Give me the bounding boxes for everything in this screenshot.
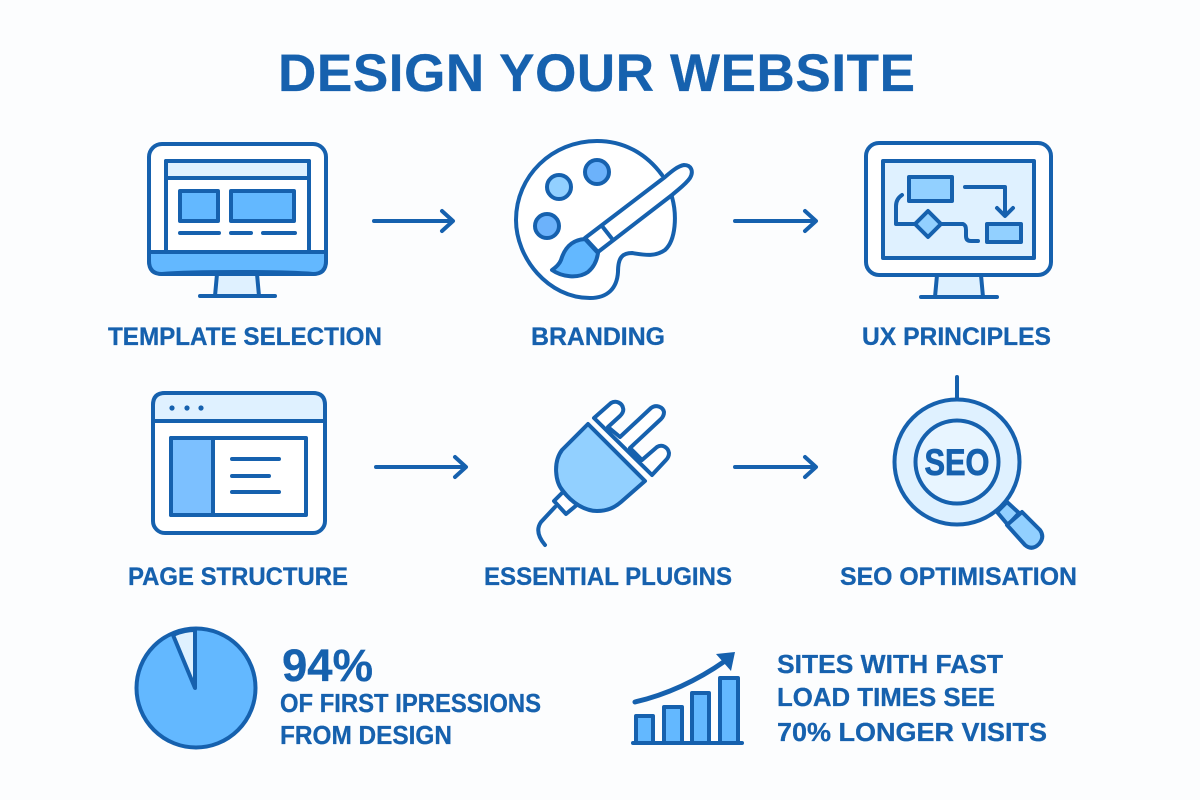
stat: 94 percent of first impressions: 94% <box>282 640 373 691</box>
stat: 94 percent of first impressions: FROM DESIGN <box>280 722 452 750</box>
bar chart with rising arrow <box>633 652 742 743</box>
icon: template monitor <box>149 144 326 296</box>
icon: SEO magnifier <box>894 377 1042 548</box>
arrow: plugins to SEO <box>735 457 816 477</box>
label: page structure: PAGE STRUCTURE <box>128 563 348 591</box>
arrow: page structure to plugins <box>376 457 466 477</box>
icon: UX flow monitor <box>866 143 1051 297</box>
icon: SEO magnifier: SEO <box>924 442 990 483</box>
pie chart: 94 percent <box>136 628 256 748</box>
icon: page structure window <box>153 393 325 533</box>
icon: palette and brush <box>516 141 692 298</box>
arrow: template to branding <box>374 211 453 231</box>
label: SEO optimisation: SEO OPTIMISATION <box>840 563 1077 591</box>
title: DESIGN YOUR WEBSITE <box>278 44 915 103</box>
label: branding: BRANDING <box>531 323 665 351</box>
stat: fast load times: 70% LONGER VISITS <box>777 717 1047 747</box>
label: template selection: TEMPLATE SELECTION <box>108 323 382 351</box>
arrow: branding to UX <box>735 211 816 231</box>
label: UX principles: UX PRINCIPLES <box>862 323 1051 351</box>
stat: fast load times: SITES WITH FAST <box>777 649 1003 679</box>
icon: plug <box>538 402 669 545</box>
label: essential plugins: ESSENTIAL PLUGINS <box>484 563 732 591</box>
stat: fast load times <box>777 649 1047 747</box>
stat: 94 percent of first impressions <box>280 640 541 750</box>
stat: 94 percent of first impressions: OF FIRST IPRESSIONS <box>280 690 541 718</box>
stat: fast load times: LOAD TIMES SEE <box>777 682 995 712</box>
